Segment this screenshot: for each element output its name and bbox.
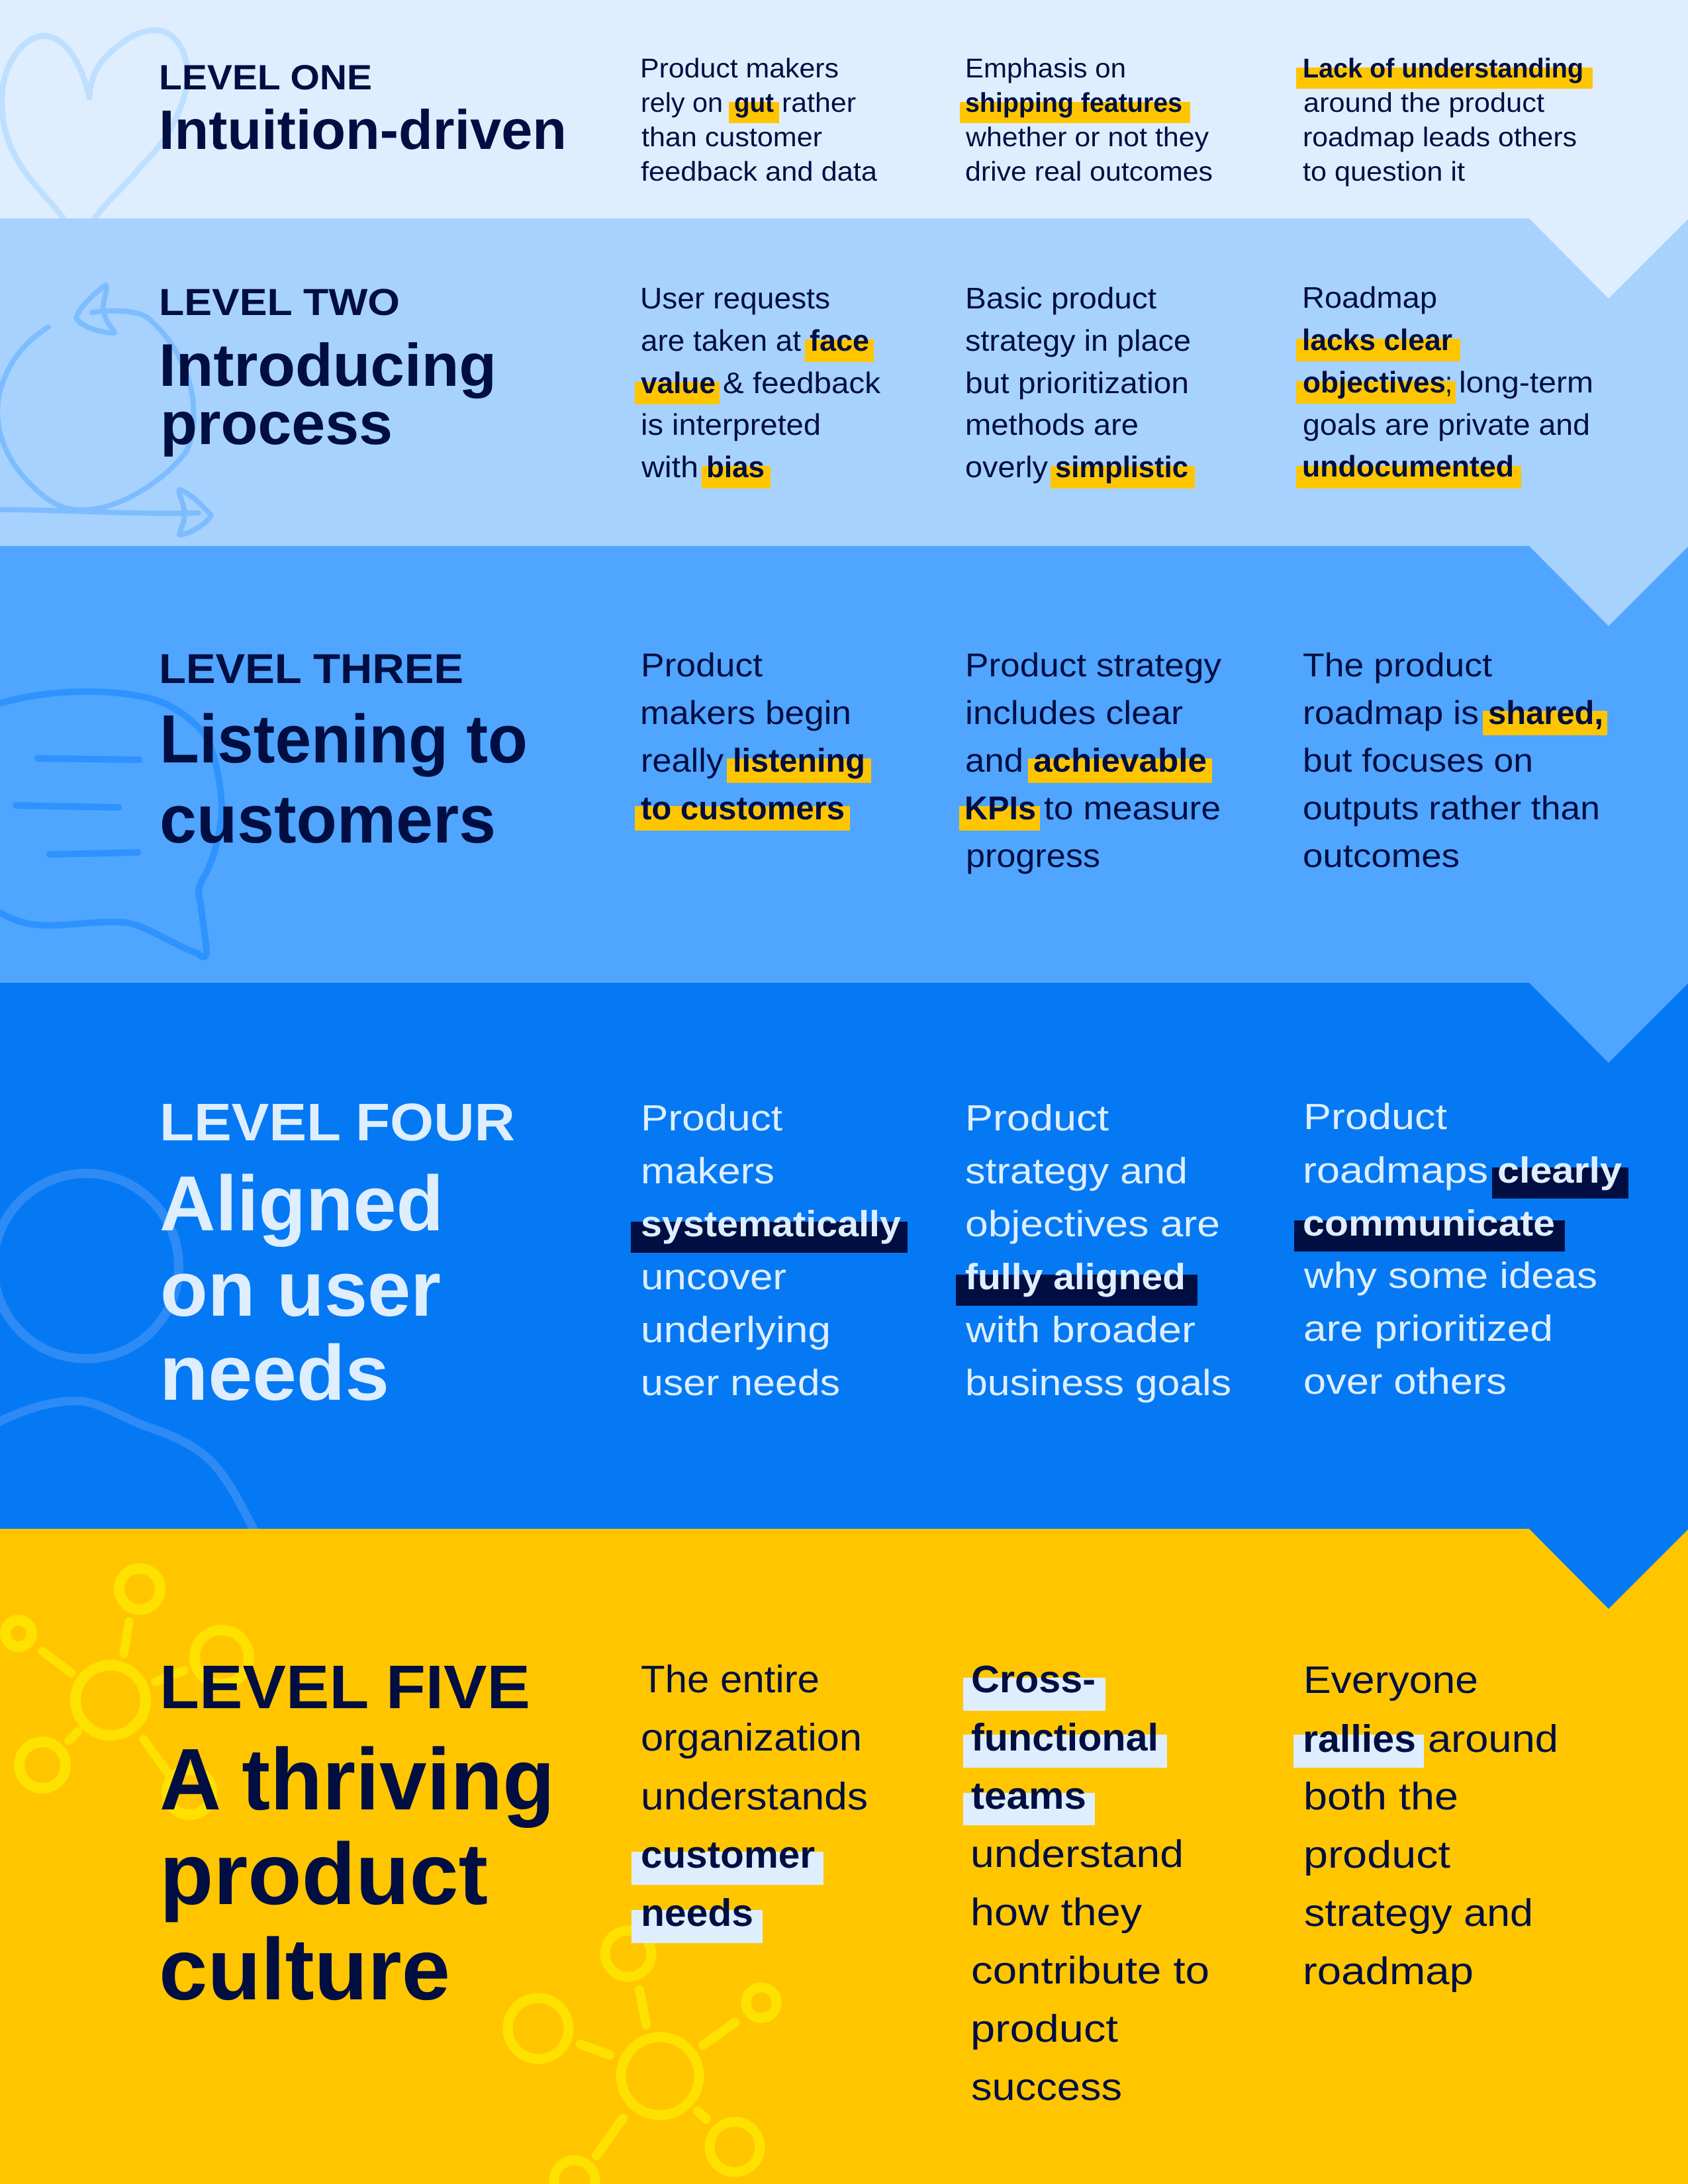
text: level one, roadmap understanding: Lack of understanding (1303, 53, 1583, 83)
arrow: level two into level three (1529, 546, 1688, 626)
text: level five, customer needs: understands (641, 1775, 868, 1818)
heading: level three: Listening to (160, 701, 528, 777)
panel: level one (0, 0, 1688, 218)
heading: level one (159, 58, 567, 161)
text: level three, roadmap shared (1303, 647, 1607, 874)
text: level four, roadmaps communicate (1294, 1096, 1628, 1402)
text: level two, user requests (635, 281, 881, 488)
arrow: level three into level four (1529, 983, 1688, 1063)
text: level three, roadmap shared: shared, (1488, 694, 1603, 731)
text: level two, roadmap: ; (1445, 365, 1452, 399)
text: level five, everyone rallies (1293, 1659, 1558, 1993)
text: level one, product makers: Product makers (640, 53, 839, 83)
text: level three, listening: makers begin (640, 694, 851, 731)
text: level five, everyone rallies: product (1303, 1833, 1450, 1876)
text: level one, roadmap understanding: roadmap leads others (1303, 122, 1577, 152)
text: level three, listening: to customers (641, 790, 845, 827)
panel: level four (0, 983, 1688, 1532)
text: level two, user requests: & feedback (723, 366, 881, 400)
text: level one, product makers: feedback and data (641, 156, 877, 187)
text: level four, roadmaps communicate: why some ideas (1303, 1255, 1597, 1296)
text: level three, roadmap shared: but focuses on (1303, 742, 1533, 779)
heading: level five: culture (159, 1921, 450, 2018)
text: level two, product strategy: but prioritization (965, 366, 1189, 400)
text: level three, KPIs: and (965, 742, 1023, 779)
text: level one, roadmap understanding: to question it (1303, 156, 1466, 187)
icon: cycle arrows (0, 285, 211, 535)
panel: level three (0, 546, 1688, 983)
text: level four, roadmaps communicate: roadmaps (1303, 1150, 1488, 1191)
text: level two, roadmap (1296, 281, 1593, 488)
heading: level four: on user (160, 1246, 441, 1333)
text: level three, KPIs: includes clear (965, 694, 1183, 731)
text: level three, KPIs: achievable (1033, 742, 1207, 779)
text: level three, KPIs: progress (966, 837, 1100, 874)
text: level one, shipping features (960, 53, 1213, 187)
text: level two, roadmap: undocumented (1302, 449, 1514, 483)
arrow: level four into level five (1529, 1529, 1688, 1609)
text: level three, KPIs: to measure (1044, 790, 1221, 827)
text: level five, everyone rallies: both the (1303, 1775, 1458, 1818)
text: level three, roadmap shared: roadmap is (1303, 694, 1479, 731)
text: level five, customer needs: customer (641, 1833, 815, 1876)
text: level five, cross-functional teams: functional (971, 1716, 1158, 1759)
icon: person outline (0, 1173, 255, 1532)
text: level five, everyone rallies: around (1428, 1717, 1558, 1760)
text: level two, product strategy: overly (965, 450, 1049, 484)
text: level two, product strategy: Basic product (965, 281, 1157, 315)
text: level three, listening: Product (641, 647, 763, 684)
text: level three, listening: listening (733, 742, 865, 779)
text: level two, user requests: face (810, 324, 869, 357)
text: level four, user needs: underlying (641, 1309, 831, 1350)
text: level one, shipping features: shipping features (965, 87, 1182, 118)
text: level five, customer needs: organization (641, 1716, 862, 1759)
text: level one, shipping features: whether or not they (965, 122, 1209, 152)
text: level three, listening (635, 647, 871, 831)
text: level three, KPIs (959, 647, 1221, 874)
text: level two, roadmap: long-term (1459, 365, 1593, 399)
text: level one, product makers: gut (734, 87, 774, 118)
text: level five, cross-functional teams (963, 1658, 1209, 2109)
panel: level two (0, 218, 1688, 546)
text: level five, cross-functional teams: how they (970, 1891, 1142, 1934)
text: level four, strategy aligned: Product (965, 1097, 1109, 1138)
text: level five, cross-functional teams: product (970, 2007, 1118, 2050)
panel: level five (0, 1529, 1688, 2184)
text: level five, customer needs: The entire (641, 1658, 820, 1701)
heading: level three: LEVEL THREE (159, 646, 463, 692)
text: level one, roadmap understanding (1296, 53, 1593, 187)
text: level five, cross-functional teams: success (971, 2066, 1122, 2109)
heading: level one: LEVEL ONE (159, 58, 372, 97)
text: level one, product makers: than customer (641, 122, 822, 152)
heading: level two (159, 281, 496, 457)
text: level two, product strategy (965, 281, 1195, 488)
text: level one, product makers (640, 53, 877, 187)
icon: speech bubble (0, 692, 222, 957)
text: level two, user requests: bias (706, 450, 765, 484)
text: level one, shipping features: Emphasis on (965, 53, 1126, 83)
text: level five, everyone rallies: strategy and (1304, 1891, 1533, 1934)
text: level one, product makers: rather (782, 87, 856, 118)
heading: level five: product (160, 1825, 488, 1923)
heading: level four: Aligned (160, 1160, 444, 1248)
heading: level three (159, 646, 528, 857)
text: level two, product strategy: strategy in place (965, 324, 1191, 357)
icon: network molecule, upper left (5, 1569, 249, 1815)
text: level four, user needs: systematically (641, 1203, 901, 1244)
text: level four, roadmaps communicate: communicate (1303, 1203, 1555, 1244)
text: level two, roadmap: Roadmap (1302, 281, 1437, 314)
text: level four, roadmaps communicate: clearly (1497, 1150, 1622, 1191)
text: level three, KPIs: KPIs (964, 790, 1036, 827)
text: level five, cross-functional teams: Cross- (971, 1658, 1096, 1701)
text: level two, user requests: are taken at (641, 324, 802, 357)
heading: level five (159, 1653, 555, 2018)
text: level one, roadmap understanding: around the product (1303, 87, 1545, 118)
heading: level two: LEVEL TWO (159, 281, 400, 324)
text: level four, user needs (631, 1097, 908, 1403)
text: level four, user needs: uncover (641, 1256, 786, 1297)
heading: level five: A thriving (160, 1731, 555, 1828)
heading: level one: Intuition-driven (159, 99, 567, 161)
text: level three, KPIs: Product strategy (965, 647, 1221, 684)
text: level four, roadmaps communicate: over others (1303, 1361, 1507, 1402)
text: level two, user requests: value (641, 366, 716, 400)
text: level two, product strategy: simplistic (1055, 450, 1188, 484)
text: level four, user needs: user needs (641, 1362, 840, 1403)
text: level four, strategy aligned: business goals (965, 1362, 1231, 1403)
text: level three, roadmap shared: The product (1303, 647, 1492, 684)
text: level four, user needs: makers (641, 1150, 774, 1191)
heading: level four: LEVEL FOUR (160, 1093, 515, 1152)
text: level five, cross-functional teams: teams (971, 1774, 1086, 1817)
text: level one, shipping features: drive real outcomes (965, 156, 1213, 187)
icon: heart (2, 30, 188, 218)
text: level four, strategy aligned: fully aligned (965, 1256, 1186, 1297)
heading: level four (160, 1093, 515, 1417)
text: level four, strategy aligned: objectives are (965, 1203, 1220, 1244)
text: level two, roadmap: lacks clear (1302, 323, 1452, 357)
text: level one, product makers: rely on (641, 87, 723, 118)
text: level four, strategy aligned: strategy and (965, 1150, 1188, 1191)
text: level two, user requests: User requests (640, 281, 830, 315)
text: level five, everyone rallies: roadmap (1303, 1950, 1474, 1993)
text: level two, product strategy: methods are (965, 408, 1139, 441)
text: level five, cross-functional teams: contribute to (971, 1949, 1209, 1992)
text: level four, strategy aligned (956, 1097, 1231, 1403)
arrow: level one into level two (1529, 218, 1688, 298)
text: level five, cross-functional teams: understand (970, 1833, 1184, 1876)
text: level two, user requests: with (641, 450, 698, 484)
icon: network molecule, lower centre (508, 1931, 776, 2184)
text: level five, customer needs: needs (641, 1891, 753, 1934)
text: level four, user needs: Product (641, 1097, 782, 1138)
text: level four, roadmaps communicate: Product (1303, 1096, 1447, 1137)
heading: level two: Introducing (159, 332, 496, 399)
text: level five, everyone rallies: rallies (1303, 1717, 1416, 1760)
text: level five, everyone rallies: Everyone (1303, 1659, 1478, 1702)
text: level three, listening: really (641, 742, 724, 779)
text: level two, roadmap: goals are private and (1303, 408, 1590, 441)
heading: level two: process (160, 390, 393, 457)
heading: level five: LEVEL FIVE (160, 1653, 530, 1721)
text: level three, roadmap shared: outcomes (1303, 837, 1460, 874)
text: level two, user requests: is interpreted (641, 408, 821, 441)
heading: level three: customers (160, 781, 496, 857)
text: level four, strategy aligned: with broader (965, 1309, 1196, 1350)
text: level five, customer needs (632, 1658, 868, 1943)
heading: level four: needs (160, 1330, 389, 1417)
text: level two, roadmap: objectives (1303, 365, 1446, 399)
text: level three, roadmap shared: outputs rather than (1303, 790, 1600, 827)
text: level four, roadmaps communicate: are prioritized (1303, 1308, 1553, 1349)
